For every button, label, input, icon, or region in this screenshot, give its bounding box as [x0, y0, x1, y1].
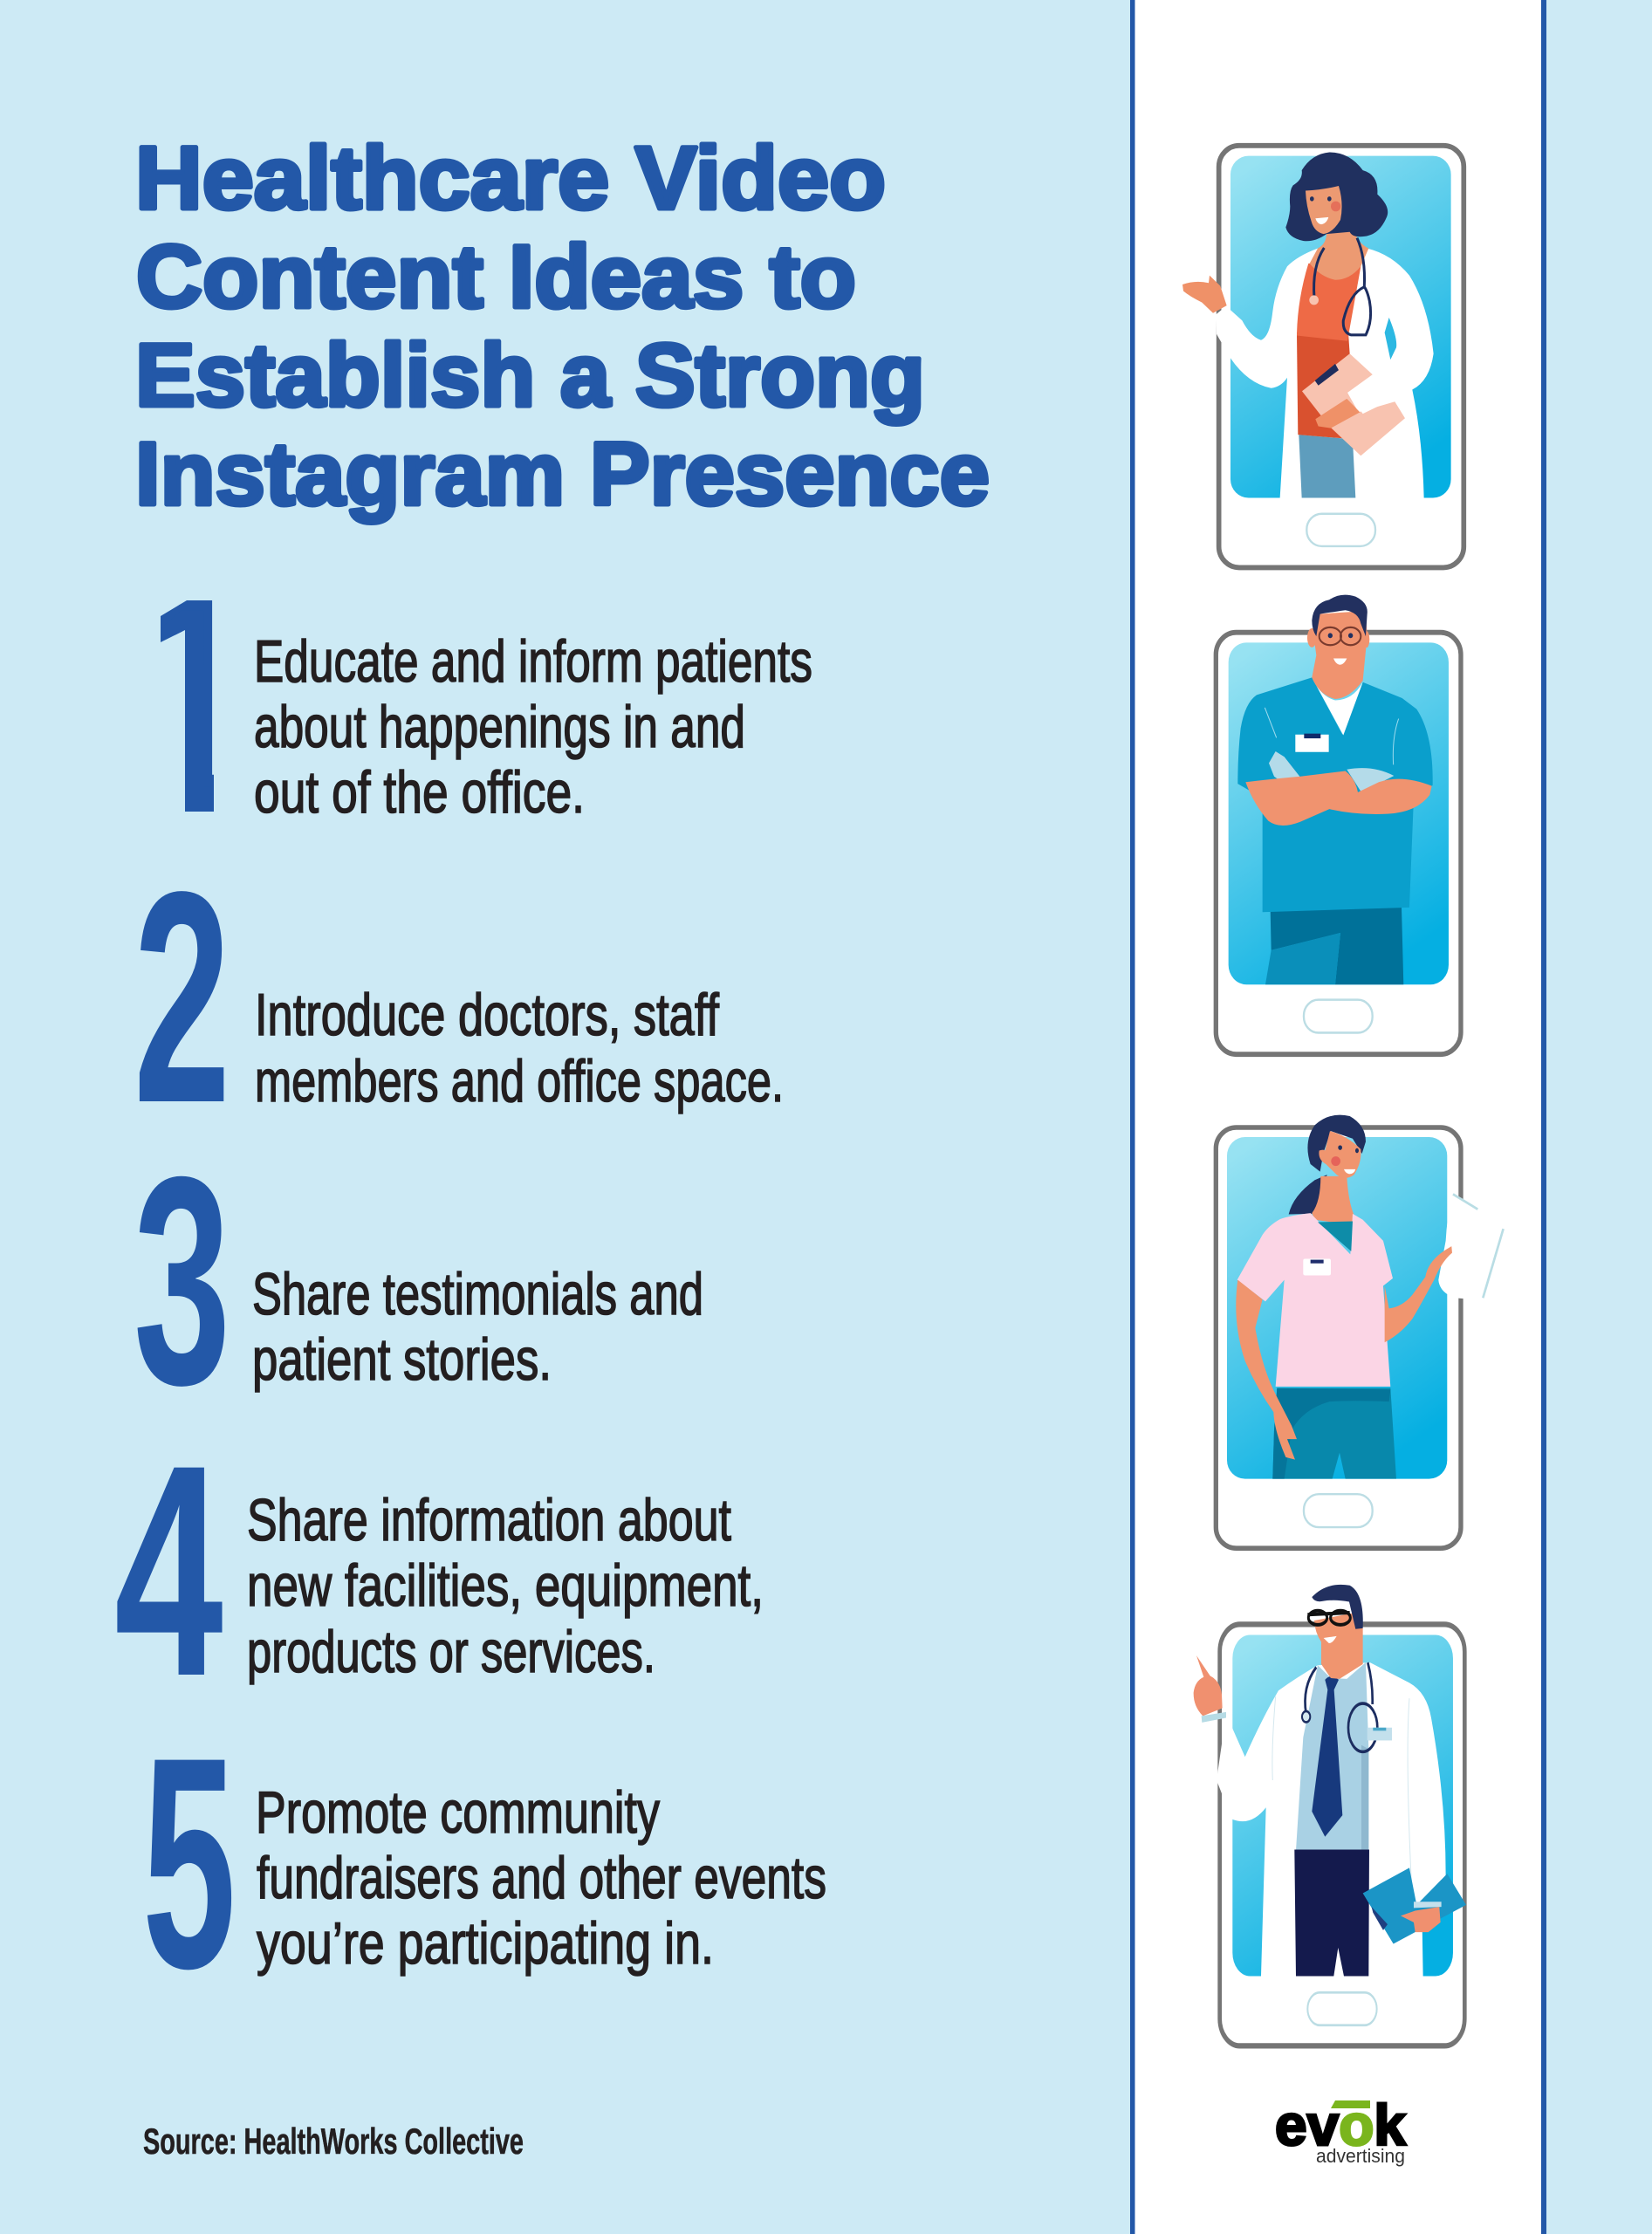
- folder and hand: [1363, 1867, 1466, 1943]
- number 2: 2: [134, 829, 230, 1165]
- title: Instagram Presence: [135, 424, 990, 524]
- text block 5: Promote community: [256, 1779, 660, 1846]
- list item 1: [161, 600, 812, 813]
- phone 2: male nurse with crossed arms: [1216, 595, 1461, 1054]
- head: [1307, 1115, 1366, 1172]
- logo: evok advertising: advertising: [1316, 2145, 1405, 2167]
- head: [1314, 1613, 1363, 1679]
- text block 4: [247, 1487, 764, 1685]
- stethoscope: [1314, 238, 1371, 335]
- ponytail: [1289, 1175, 1327, 1215]
- number 1: 1: [127, 539, 248, 875]
- text block 3: Share testimonials and: [252, 1261, 703, 1327]
- source line: Source: HealthWorks Collective: [143, 2121, 524, 2162]
- logo: evok advertising: evok: [1275, 2093, 1406, 2157]
- text block 4: new facilities, equipment,: [247, 1552, 764, 1619]
- stethoscope: [1305, 1662, 1377, 1751]
- text block 2: members and office space.: [255, 1048, 784, 1114]
- text block 1: about happenings in and: [254, 694, 745, 760]
- number 5: 5: [142, 1696, 236, 2032]
- phone 4: male doctor with tablet: [1194, 1585, 1466, 2046]
- text block 5: you’re participating in.: [257, 1910, 714, 1977]
- list item 2: [134, 829, 784, 1165]
- crossed arms: [1245, 771, 1432, 826]
- text block 1: Educate and inform patients: [254, 628, 812, 695]
- text block 4: products or services.: [247, 1619, 655, 1685]
- title: Healthcare Video: [135, 128, 886, 228]
- number 3: 3: [134, 1116, 230, 1447]
- title: [135, 128, 990, 524]
- list item 5: [142, 1696, 826, 2032]
- hair: [1285, 152, 1388, 241]
- white coat: [1217, 1662, 1446, 1977]
- text block 3: [252, 1261, 703, 1393]
- title: Establish a Strong: [135, 326, 925, 425]
- list item 4: [114, 1402, 764, 1739]
- left arm: [1236, 1280, 1297, 1460]
- phone 1: female doctor with clipboard: [1182, 146, 1463, 567]
- title: Content Ideas to: [136, 227, 856, 326]
- clipboard and papers: [1302, 353, 1405, 456]
- text block 5: [256, 1779, 826, 1977]
- shirt: [1237, 1213, 1393, 1387]
- text block 2: [255, 982, 784, 1114]
- phone 3: female nurse with paper: [1216, 1115, 1504, 1548]
- head: [1312, 611, 1368, 699]
- text block 3: patient stories.: [252, 1326, 552, 1393]
- name badge: [1295, 735, 1329, 752]
- text block 2: Introduce doctors, staff: [255, 982, 719, 1048]
- list item 3: [134, 1116, 703, 1447]
- text block 1: out of the office.: [254, 759, 585, 826]
- pocket label: [1368, 1728, 1392, 1740]
- number 4: 4: [114, 1402, 224, 1739]
- waving hand: [1182, 276, 1227, 313]
- tie: [1312, 1676, 1342, 1837]
- text block 5: fundraisers and other events: [257, 1845, 826, 1911]
- text block 4: Share information about: [247, 1487, 731, 1553]
- panel: white column: [1130, 0, 1546, 2234]
- raised hand: [1194, 1655, 1223, 1716]
- right arm and paper: [1438, 1193, 1504, 1300]
- text block 1: [254, 628, 812, 826]
